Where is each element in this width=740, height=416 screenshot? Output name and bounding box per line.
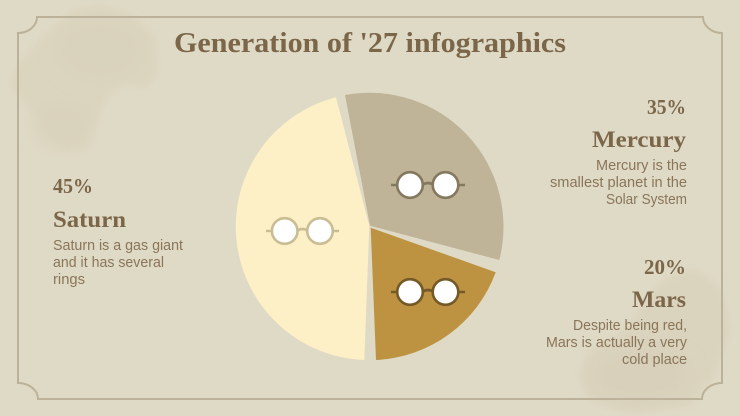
text block: Saturn: Saturn: [53, 207, 126, 232]
text block: Saturn: Saturn is a gas giant: [53, 238, 183, 254]
text block: Mars: Mars: [632, 287, 686, 312]
slice: Saturn: [236, 97, 369, 360]
text block: Saturn: [53, 174, 183, 288]
text block: Saturn: and it has several: [53, 255, 164, 271]
icon: glasses on Saturn slice: [266, 218, 339, 244]
text block: Mercury: Solar System: [606, 192, 687, 208]
text block: Mercury: 35%: [647, 95, 686, 119]
text block: Saturn: rings: [53, 272, 85, 288]
text block: Mars: cold place: [622, 352, 687, 368]
watercolor stain: top left: [10, 5, 157, 150]
icon: glasses on Mercury slice: [391, 172, 465, 198]
text block: Mercury: Mercury: [592, 127, 687, 152]
slice: Mercury: [345, 93, 503, 260]
text block: Saturn: 45%: [53, 174, 93, 198]
text block: Mars: 20%: [644, 255, 686, 279]
watercolor stain: bottom right: [578, 268, 730, 412]
title: Generation of '27 infographics: [174, 27, 566, 59]
text block: Mercury: [550, 95, 687, 208]
icon: glasses on Mars slice: [391, 279, 465, 305]
text block: Mars: Despite being red,: [573, 318, 687, 334]
slice: Mars: [371, 228, 496, 360]
text block: Mars: [546, 255, 688, 368]
text block: Mercury: smallest planet in the: [550, 175, 687, 191]
text block: Mercury: Mercury is the: [596, 158, 687, 174]
text block: Mars: Mars is actually a very: [546, 335, 688, 351]
pie chart: [236, 93, 503, 360]
